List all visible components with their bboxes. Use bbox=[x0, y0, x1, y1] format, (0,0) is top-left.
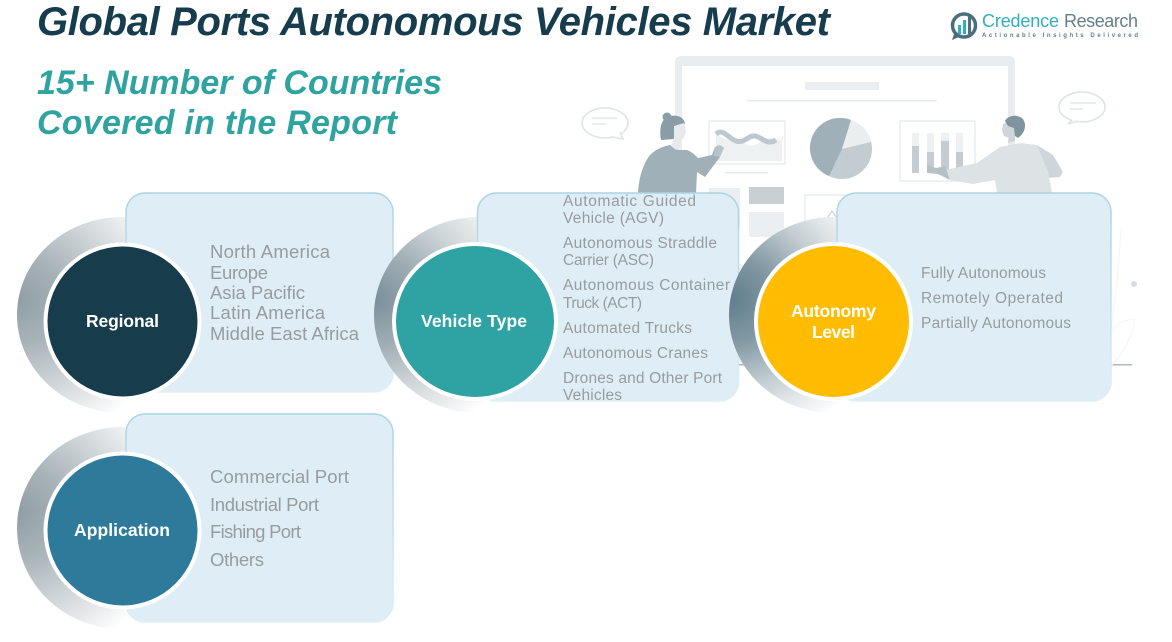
decorative gradient crescent bbox=[17, 427, 227, 629]
bar chart card bbox=[900, 121, 975, 181]
person right bbox=[927, 116, 1063, 193]
segment: Autonomy Level bbox=[729, 193, 1111, 413]
logo: Credence Research: Actionable Insights Delivered bbox=[982, 33, 1138, 39]
panel: Application list: Commercial Port bbox=[210, 466, 349, 487]
speech bubble left bbox=[582, 108, 628, 139]
floor line bbox=[739, 364, 1132, 366]
panel: Autonomy Level list: Fully Autonomous bbox=[921, 265, 1046, 282]
panel: Regional list: Latin America bbox=[210, 302, 326, 323]
subtitle: 15+ Number of Countries bbox=[37, 64, 442, 102]
panel: Vehicle Type list: Autonomous Straddle bbox=[563, 235, 717, 252]
badge: Vehicle Type bbox=[392, 242, 558, 401]
panel: Regional list: Middle East Africa bbox=[210, 323, 360, 344]
decorative gradient crescent bbox=[17, 217, 227, 413]
panel: Autonomy Level list: Partially Autonomous bbox=[921, 315, 1071, 332]
panel: Vehicle Type list: Vehicle (AGV) bbox=[563, 210, 664, 227]
icon: logo chart ring bbox=[952, 14, 976, 40]
decorative plant bbox=[1111, 230, 1137, 366]
panel: Regional list: Asia Pacific bbox=[210, 282, 305, 303]
panel: Vehicle Type list: Autonomous Container bbox=[563, 277, 730, 294]
speech bubble right bbox=[1059, 92, 1105, 124]
panel: Vehicle Type list: Drones and Other Port bbox=[563, 370, 723, 387]
background illustration: presentation board bbox=[582, 56, 1137, 366]
panel: Vehicle Type list: Automated Trucks bbox=[563, 320, 692, 337]
line chart card bbox=[709, 121, 785, 164]
panel: Vehicle Type list: Carrier (ASC) bbox=[563, 252, 654, 269]
lower board cards bbox=[709, 187, 845, 364]
logo: Credence Research: Research bbox=[1064, 11, 1138, 31]
badge: Application: Application bbox=[74, 520, 170, 540]
panel: Autonomy Level list: Remotely Operated bbox=[921, 290, 1063, 307]
badge: Autonomy Level: Autonomy bbox=[791, 301, 876, 321]
panel: Regional list: North America bbox=[210, 241, 331, 262]
badge: Regional bbox=[44, 242, 202, 400]
badge: Autonomy Level bbox=[754, 242, 913, 401]
panel: Application list: Industrial Port bbox=[210, 494, 319, 515]
panel: Vehicle Type list: Truck (ACT) bbox=[563, 295, 642, 312]
subtitle: Covered in the Report bbox=[37, 104, 399, 142]
badge: Regional: Regional bbox=[86, 311, 159, 331]
badge: Vehicle Type: Vehicle Type bbox=[421, 311, 527, 331]
panel: Regional list bbox=[126, 193, 393, 392]
subtitle bbox=[37, 64, 442, 142]
panel: Vehicle Type list: Autonomous Cranes bbox=[563, 345, 708, 362]
panel: Application list: Others bbox=[210, 549, 264, 570]
panel: Application list bbox=[126, 414, 393, 622]
segment: Vehicle Type bbox=[374, 193, 738, 413]
decorative gradient crescent bbox=[729, 217, 939, 413]
badge: Autonomy Level: Level bbox=[812, 322, 855, 342]
monitor frame bbox=[675, 56, 1015, 193]
badge: Application bbox=[44, 452, 202, 610]
panel: Autonomy Level list bbox=[837, 193, 1111, 401]
title: Global Ports Autonomous Vehicles Market bbox=[37, 0, 832, 44]
segment: Regional bbox=[17, 193, 393, 413]
person left bbox=[638, 112, 724, 193]
segment: Application bbox=[17, 414, 393, 629]
panel: Vehicle Type list: Automatic Guided bbox=[563, 193, 696, 210]
logo: Credence Research: Credence bbox=[982, 11, 1059, 31]
panel: Regional list: Europe bbox=[210, 262, 268, 283]
decorative gradient crescent bbox=[374, 217, 584, 413]
logo: Credence Research bbox=[952, 11, 1138, 40]
panel: Vehicle Type list bbox=[478, 193, 738, 404]
pie chart bbox=[810, 118, 872, 179]
panel: Vehicle Type list: Vehicles bbox=[563, 387, 622, 404]
panel: Application list: Fishing Port bbox=[210, 521, 301, 542]
monitor heading bar bbox=[805, 82, 879, 90]
